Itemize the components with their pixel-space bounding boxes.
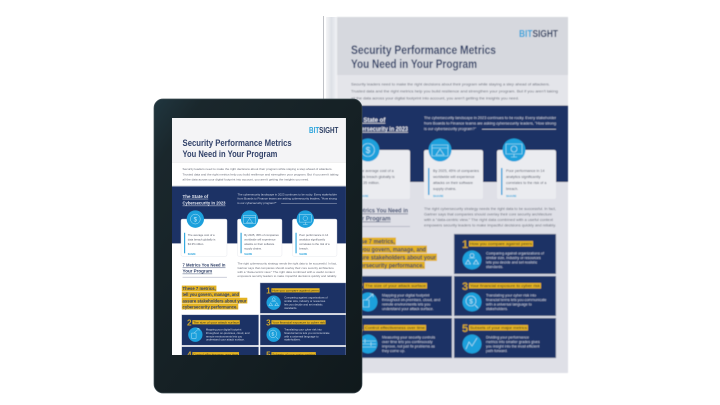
landscape text: from Boards to Finance teams are asking cybersecurity leaders, "How strong — [424, 122, 556, 126]
intro text: all the data across your digital footprint into account, you aren't getting the insights you need. — [351, 96, 519, 100]
metric 1: lets you decide and set realistic — [486, 260, 537, 264]
screen metric 2: understand your attack surface. — [206, 338, 245, 342]
screen stat card 3: correlates to the risk of a — [299, 242, 330, 246]
screen title: Security Performance Metrics — [183, 138, 292, 148]
screen metric 2: remote environments lets you — [206, 334, 243, 338]
stat card 1: $4.35 million. — [358, 181, 380, 185]
title: You Need in Your Program — [351, 57, 477, 71]
screen metric 3: 3 — [266, 317, 271, 327]
lower page background — [337, 106, 568, 373]
screen stat card 3 — [292, 210, 337, 256]
intro text: Security leaders need to make the right decisions about their program while staying a step ahead of attackers. — [351, 82, 550, 86]
screen metric 2: 2 — [187, 317, 192, 327]
metric 1: Comparing against organizations of — [486, 252, 545, 256]
screen metric 3: stakeholders. — [284, 338, 301, 342]
screen intro text: all the data across your digital footprint into account, you aren't getting the insights you need. — [183, 178, 309, 182]
metric 2: remote environments lets you — [382, 302, 430, 306]
screen gartner text — [238, 262, 337, 278]
screen section heading: 7 metrics — [183, 263, 226, 274]
gartner text — [424, 207, 556, 228]
screen landscape text: The cybersecurity landscape in 2023 continues to be rocky. Every stakeholder — [238, 193, 337, 197]
screen stat card 1: data breach globally is — [188, 237, 216, 241]
metric 4: Measuring your security controls — [382, 336, 435, 340]
stat card 2: supply chains. — [433, 187, 456, 191]
screen landscape text — [238, 194, 337, 204]
title — [351, 43, 496, 71]
stat card 3: SHARE — [506, 194, 517, 198]
intro text — [351, 82, 558, 100]
screen gartner text: with a "data-centric view." The right data combined with a useful context — [238, 270, 335, 274]
gartner text: The right cybersecurity strategy needs the right data to be successful. In fact, — [424, 207, 556, 211]
metric 1: 1 — [462, 239, 468, 251]
gartner text: Gartner says that companies should overlay their core security architecture — [424, 212, 552, 216]
screen stat card 2: attacks on their software — [244, 242, 275, 246]
screen stat card 3: breach. — [299, 246, 309, 250]
metric 3: Translating your cyber risk into — [486, 294, 536, 298]
screen highlighted statement: assure stakeholders about your — [183, 298, 247, 303]
stat card 1: $ — [366, 146, 371, 155]
screen metric 1: 1 — [266, 286, 271, 296]
screen metric 4: 4 — [187, 349, 192, 359]
section heading: 7 metrics — [351, 208, 408, 222]
screen intro text: Trusted data and the right metrics help you build resilience and strengthen your program. But if you aren't taking — [183, 172, 339, 176]
highlighted statement: cybersecurity performance. — [351, 264, 424, 270]
metric 3: Your financial exposure to cyber risk — [470, 284, 540, 288]
screen stat card 3: SHARE — [299, 253, 308, 256]
screen stat card 3: analytics significantly — [299, 237, 326, 241]
screen metric 1: similar size, industry or resources — [284, 299, 326, 303]
screen section heading: 7 metrics: Your Program — [183, 269, 212, 274]
screen metric 2 — [182, 315, 259, 345]
screen metric 1: lets you decide and set realistic — [284, 302, 323, 306]
landscape text: The cybersecurity landscape in 2023 continues to be rocky. Every stakeholder — [424, 116, 557, 120]
screen stat card 1: $4.35 million. — [188, 242, 204, 246]
metric 5: path forward. — [486, 349, 508, 353]
logo: BITSIGHT — [519, 28, 558, 40]
screen stat card 2: supply chains. — [244, 246, 262, 250]
screen metric 3: $ — [272, 332, 275, 338]
metric 3 — [454, 276, 556, 316]
highlighted statement: tell you govern, manage, and — [351, 248, 426, 254]
screen metric 2: throughout on-premises, cloud, and — [206, 331, 250, 335]
screen metric 5 — [260, 346, 346, 355]
stat card 2: attacks on their software — [433, 181, 473, 185]
gartner text: with a "data-centric view." The right data combined with a useful context — [424, 218, 553, 222]
stat card 1 — [349, 138, 410, 199]
screen lower background — [172, 186, 346, 355]
screen stat card 2: worldwide will experience — [244, 237, 276, 241]
tablet screen — [172, 118, 346, 355]
screen highlighted statement: cybersecurity performance. — [183, 304, 238, 309]
highlighted statement: These 7 metrics, — [351, 240, 395, 246]
screen header band — [172, 118, 346, 162]
screen title: You Need in Your Program — [183, 149, 277, 159]
screen metric 1: How you compare against peers — [272, 288, 320, 292]
title: Security Performance Metrics — [351, 43, 496, 57]
stat card 1: The average cost of a — [358, 169, 395, 173]
intro text: Trusted data and the right metrics help you build resilience and strengthen your program. But if you aren't taking — [351, 90, 558, 94]
metric 3: with a universal language to — [486, 302, 532, 306]
screen metric 3 — [260, 315, 346, 345]
screen stat card 1 — [181, 210, 227, 256]
metric 5: Dividing your performance — [486, 336, 529, 340]
screen stat card 1: The average cost of a — [188, 233, 215, 237]
metric 2: Mapping your digital footprint — [382, 294, 429, 298]
screen section heading: state of cybersecurity: The State of — [183, 194, 209, 199]
screen metric 3: Your financial exposure to cyber risk — [272, 320, 326, 324]
stat card 2: By 2025, 45% of companies — [433, 169, 479, 173]
screen stat card 1: SHARE — [188, 253, 196, 256]
landscape text — [424, 116, 557, 131]
stat card 1: data breach globally is — [358, 175, 395, 179]
screen highlighted statement: These 7 metrics, — [183, 286, 216, 291]
metric 4: Control effectiveness over time — [365, 326, 425, 330]
screen stat card 2 — [238, 210, 282, 256]
section heading: 7 metrics: 7 Metrics You Need in — [351, 208, 408, 214]
screen stat card 2: SHARE — [244, 253, 253, 256]
stat card 3: analytics significantly — [506, 175, 541, 179]
booklet page — [337, 17, 568, 373]
metric 1 — [454, 234, 556, 274]
metric 2: throughout on-premises, cloud, and — [382, 298, 440, 302]
metric 2: understand your attack surface. — [382, 307, 434, 311]
stat card 3: breach. — [506, 187, 518, 191]
metric 3: 3 — [462, 281, 468, 293]
highlighted statement: assure stakeholders about your — [351, 256, 437, 262]
intro band — [337, 75, 568, 106]
screen gartner text: The right cybersecurity strategy needs the right data to be successful. In fact, — [238, 262, 337, 266]
screen gartner text: empowers security leaders to make impactful decisions quickly and reliably. — [238, 274, 337, 278]
metric 5 — [454, 318, 556, 358]
tablet bezel — [154, 99, 362, 393]
screen stat card 2: By 2025, 45% of companies — [244, 233, 279, 237]
screen metric 5: Subsets of your major metrics — [272, 352, 316, 356]
gartner text: empowers security leaders to make impactful decisions quickly and reliably. — [424, 224, 556, 228]
screen metric 4 — [182, 346, 259, 355]
screen metric 3: financial terms lets you communicate — [284, 331, 330, 335]
screen section heading: state of cybersecurity: Cybersecurity in 2023 — [183, 201, 226, 206]
screen metric 3: with a universal language to — [284, 334, 319, 338]
metric 4: 4 — [357, 323, 364, 335]
metric 4: they come up. — [382, 349, 405, 353]
metric 4: over time lets you continuously — [382, 340, 433, 344]
metric 1: How you compare against peers — [470, 242, 532, 246]
screen landscape text: is our cybersecurity program?" — [238, 201, 277, 205]
screen logo: BITSIGHT — [309, 126, 339, 135]
screen metric 4: Control effectiveness over time — [193, 352, 239, 356]
metric 5: metrics into smaller grades gives — [486, 340, 540, 344]
metric 3: stakeholders. — [486, 307, 508, 311]
booklet spine edge — [323, 16, 337, 373]
screen intro text: Security leaders need to make the right decisions about their program while staying a step ahead of attackers. — [183, 167, 333, 171]
metric 2: The size of your attack surface — [365, 284, 426, 288]
stat card 2 — [424, 138, 483, 199]
booklet: printed report — [323, 16, 568, 373]
tablet device — [154, 99, 362, 393]
screen stat card 3: Poor performance in 14 — [299, 233, 329, 237]
screen section heading: 7 metrics: 7 Metrics You Need in — [183, 263, 226, 268]
screen intro band — [172, 162, 346, 186]
screen stat card 1: $ — [194, 217, 198, 223]
screen metric 1: standards. — [284, 306, 297, 310]
navy state of cybersecurity band — [337, 106, 568, 182]
metric 5: 5 — [462, 323, 468, 335]
screen highlighted statement — [182, 286, 247, 310]
metric 2: 2 — [357, 281, 363, 293]
stat card 2: SHARE — [433, 194, 444, 198]
screen metric 2: The size of your attack surface — [193, 320, 240, 324]
section heading: state of cybersecurity: The State of — [351, 118, 386, 124]
stat card 2: worldwide will experience — [433, 175, 475, 179]
metric 1: standards. — [486, 265, 503, 269]
screen metric 2: Mapping your digital footprint — [206, 327, 242, 331]
metric 2 — [350, 276, 452, 316]
highlighted statement — [350, 238, 437, 270]
section heading: state of cybersecurity: Cybersecurity in 2023 — [351, 127, 409, 133]
landscape text: is our cybersecurity program?" — [424, 127, 477, 131]
screen gartner text: Gartner says that companies should overlay their core security architecture — [238, 266, 334, 270]
metric 4 — [350, 318, 452, 358]
metric 5: Subsets of your major metrics — [470, 326, 527, 330]
screen metric 1 — [260, 283, 346, 313]
screen highlighted statement: tell you govern, manage, and — [183, 292, 239, 297]
screen metric 5: 5 — [266, 349, 271, 359]
metric 5: you insight into the most efficient — [486, 344, 539, 348]
metric 1: similar size, industry or resources — [486, 256, 541, 260]
metric 3: $ — [469, 298, 473, 306]
section heading: 7 metrics: Your Program — [351, 216, 391, 222]
stat card 3: correlates to the risk of a — [506, 181, 547, 185]
screen section heading: state of cybersecurity — [183, 194, 226, 206]
stat card 3: Poor performance in 14 — [506, 169, 545, 173]
section heading: state of cybersecurity — [351, 118, 409, 133]
header band — [337, 17, 568, 75]
screen navy band — [172, 186, 346, 243]
metric 4: improve, not just fix problems as — [382, 344, 435, 348]
metric 3: financial terms lets you communicate — [486, 298, 546, 302]
screen heading rule — [183, 277, 227, 278]
stat card 3 — [497, 138, 556, 199]
screen title — [183, 138, 292, 159]
screen metric 1: Comparing against organizations of — [284, 295, 328, 300]
stat card 1: SHARE — [358, 194, 369, 198]
screen intro text — [182, 168, 338, 181]
heading rule — [351, 226, 410, 227]
screen landscape text: from Boards to Finance teams are asking cybersecurity leaders, "How strong — [238, 197, 337, 201]
screen metric 3: Translating your cyber risk into — [284, 327, 322, 331]
